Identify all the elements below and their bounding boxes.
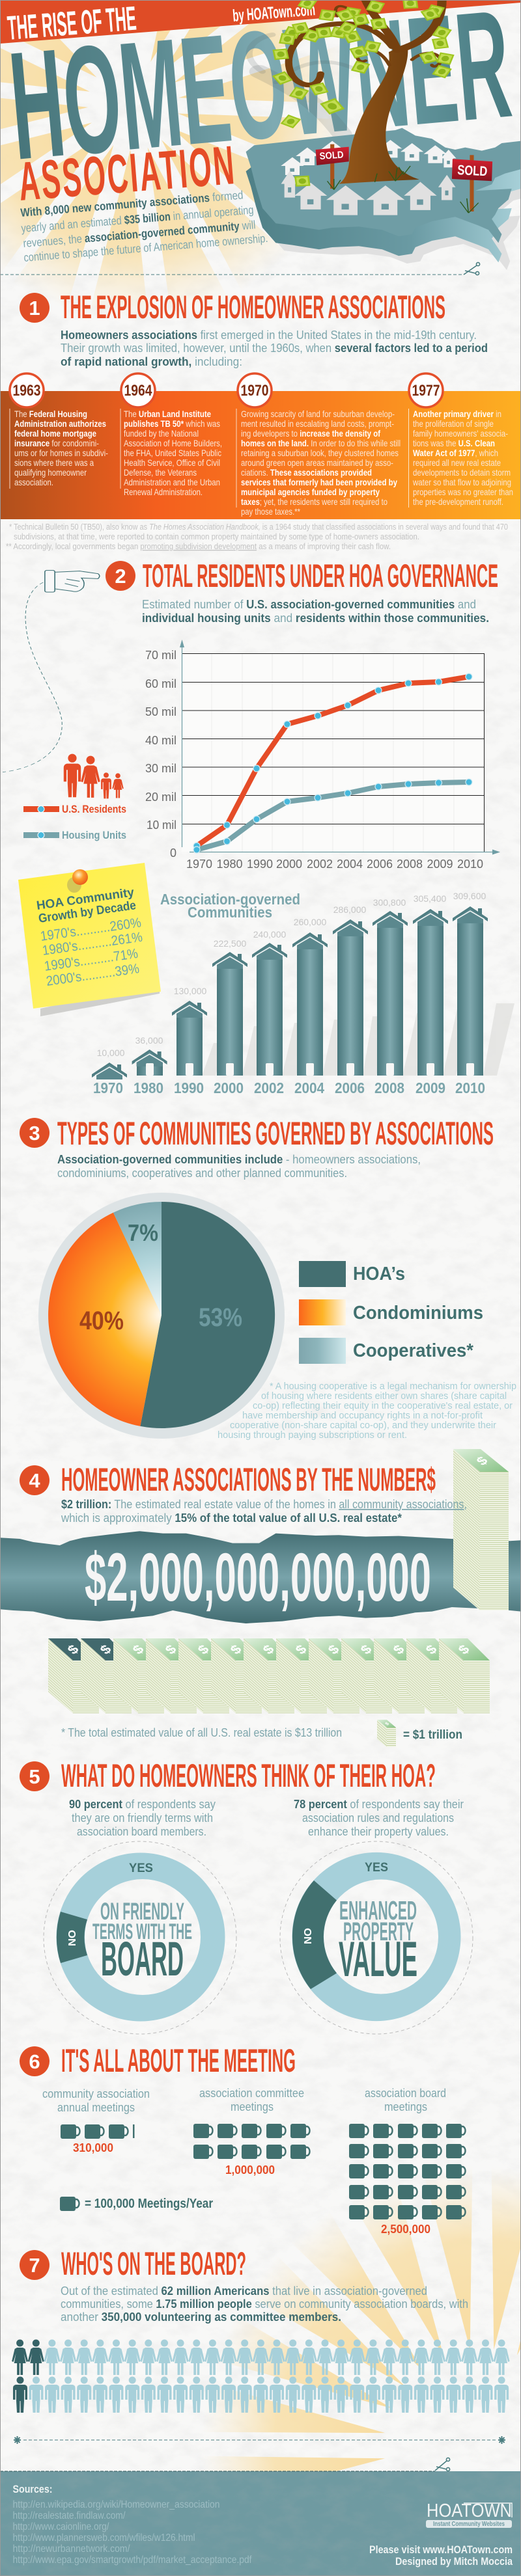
intro text: Homeowners associations first emerged in the United States in the mid-19th century. [61,329,477,342]
section 5 [20,1757,473,2034]
houses [281,140,457,175]
sticky note [18,863,161,1016]
header: intro text: With 8,000 new community associations formed [20,189,244,219]
number badge 3 [20,1118,49,1148]
annual meetings: annual meetings [57,2101,135,2114]
left statement: they are on friendly terms with [72,1811,213,1824]
bar 1980 [132,1035,167,1096]
bar 1990 [172,986,207,1096]
section 6 [20,2042,465,2236]
pie legend: HOA’s [353,1264,405,1284]
column 1964: The Urban Land Institute [124,409,211,419]
left statement [69,1798,216,1838]
tree shadow on letters [249,34,356,135]
icon: scissors [464,262,480,275]
donut: property value: VALUE [339,1932,417,1987]
icon: pointing hand [45,571,100,592]
bar 2004 [292,917,328,1096]
column 1970: homes on the land. In order to do this while still [241,438,401,448]
cooperative footnote [218,1381,516,1441]
axis labels: 0 [170,847,176,860]
column 1963 [10,409,108,489]
header: intro text: revenues, the association-governed community will [23,218,256,250]
axis labels: 30 mil [145,762,176,775]
pie legend [299,1261,483,1364]
note heading [36,886,137,926]
committee meetings: association committee [199,2087,304,2100]
money stacks: row: $ [455,1642,473,1657]
sources list: http://www.plannersweb.com/wfiles/w126.html [13,2532,195,2543]
right statement: association rules and regulations [302,1811,454,1824]
note list: 2000's..........39% [45,961,140,989]
donut: friendly terms: ON FRIENDLY [100,1898,184,1925]
logo: HOATown: Instant Community Websites [433,2521,505,2528]
pie legend: Condominiums [353,1303,483,1323]
column 1963: Administration authorizes [14,418,106,429]
money stacks: row: $ [227,1642,245,1657]
description: which is approximately 15% of the total value of all U.S. real estate* [61,1512,402,1525]
column 1964: funded by the National [124,428,199,439]
money stacks: row: $ [97,1642,115,1657]
axis labels: 40 mil [145,734,176,747]
money stacks: row: $ [325,1642,343,1657]
year labels: 2009 [427,858,453,871]
column 1977: Another primary driver in [413,409,501,419]
bar 1970: 10,000 [97,1048,125,1058]
column 1964: Association of Home Builders, [124,438,222,448]
description [61,2285,468,2324]
axis labels [145,649,176,860]
money stacks: row: $ [292,1642,310,1657]
annual meetings: community association [42,2087,150,2100]
cooperative footnote: cooperative (non-share capital co-op), and they underwrite their [230,1420,496,1431]
year labels: 2006 [367,858,393,871]
description: $2 trillion: The estimated real estate value of the homes in all community associations, [61,1498,467,1511]
footnotes: subdivisions, at that time, were reported to contain common property maintained by some type of home-owners association. [14,532,419,541]
money stacks: row: $ [423,1642,440,1657]
number badge 4: 4 [29,1469,40,1492]
year labels [186,858,483,871]
bar shadows [202,1003,514,1076]
number badge 2: 2 [115,565,126,588]
board meetings: meetings [384,2100,427,2113]
torn banner [0,1531,521,1623]
description: Out of the estimated 62 million Americans that live in association-governed [61,2285,427,2298]
pie chart: 7% [128,1219,158,1246]
column 1970: ing developers to increase the density of [241,428,380,439]
bar 1970: 1970 [93,1079,123,1096]
sources list: http://www.epa.gov/smartgrowth/pdf/market_acceptance.pdf [13,2555,252,2566]
column 1970: taxes; yet, the residents were still required to [241,496,387,507]
column 1964 [120,409,222,497]
column 1977: the proliferation of single [413,418,494,429]
description: Estimated number of U.S. association-governed communities and [142,598,476,611]
bar 1990: 1990 [174,1079,204,1096]
column 1963: qualifying homeowner [14,467,87,478]
annual meetings: 310,000 [73,2141,113,2154]
year badges: 1970 [241,382,268,400]
column 1963: ums or for homes in subdivi- [14,448,108,458]
column 1977: tions was the U.S. Clean [413,438,495,448]
note list: 1990's..........71% [43,946,139,974]
tree trunk [339,44,419,184]
series points [193,673,472,853]
sign 1 [316,147,349,165]
cut line [0,274,464,275]
sign 2 [452,159,492,181]
bar 2008 [373,897,408,1096]
donut: friendly terms: BOARD [101,1932,184,1986]
dashed divider with asterisks [14,2436,505,2444]
bar 2010: 2010 [455,1079,485,1096]
grass [328,166,479,213]
section 7: WHO'S ON THE BOARD? [61,2245,246,2282]
money stacks: row: $ [390,1642,408,1657]
cooperative footnote: of housing where residents either own shares (share capital [261,1390,507,1402]
column 1970: Growing scarcity of land for suburban develop- [241,409,395,419]
column 1970: ciations. These associations provided [241,467,372,478]
bar 2000: 2000 [214,1079,244,1096]
donut: property value: PROPERTY [343,1918,414,1946]
sources list: http://realestate.findlaw.com/ [13,2510,126,2521]
credits [369,2543,513,2568]
year labels: 2004 [337,858,363,871]
number badge 3: 3 [29,1122,40,1145]
section 4 [0,1449,521,1747]
cooperative footnote: * A housing cooperative is a legal mechanism for ownership [270,1381,516,1392]
communities chart title [160,891,300,921]
footnotes: ** Accordingly, local governments began promoting subdivision development as a means of improving their cash flow. [6,541,391,551]
column 1963: federal home mortgage [14,428,96,439]
column 1964: Administration and the Urban [124,477,220,487]
header: intro text: continue to shape the future of American home ownership. [23,232,268,264]
column 1964: Defense, the Veterans [124,467,197,478]
note heading: Growth by Decade [38,899,137,926]
note list: 1980's..........261% [41,930,143,958]
year labels: 1990 [247,858,273,871]
left statement: association board members. [77,1825,206,1838]
description: Association-governed communities include - homeowners associations, [57,1153,421,1166]
board meetings: association board [365,2087,446,2100]
intro text [61,329,488,368]
communities chart title: Communities [188,904,272,921]
number badge 7 [20,2250,49,2280]
donut: property value: NO [303,1928,314,1944]
column 1970: retaining a suburban look, they clustered homes [241,448,399,458]
cooperative footnote: co-op) reflecting their equity in the cooperative's real estate, or [253,1400,513,1411]
number badge 1: 1 [29,297,40,319]
logo: HOATown: HOATOWN [427,2501,512,2521]
note heading: HOA Community [36,886,135,913]
number badge 5: 5 [29,1765,40,1788]
communities chart title: Association-governed [160,891,300,908]
illustration: USA map with houses, tree and signs [246,0,521,270]
column 1963: association. [14,477,53,487]
chart legend: U.S. Residents [62,803,126,815]
people row: women [12,2340,510,2375]
column 1970: pay those taxes.** [241,506,300,517]
year labels: 2002 [307,858,333,871]
axes [180,640,500,855]
donut: property value [280,1841,473,2034]
logo: HOATown [426,2501,512,2528]
column 1970: municipal agencies funded by property [241,487,380,497]
sources list: http://en.wikipedia.org/wiki/Homeowner_association [13,2499,220,2510]
intro text: of rapid national growth, including: [61,355,242,368]
column 1970 [236,409,401,517]
bar 2004: 2004 [294,1079,324,1096]
bar 2010: 309,600 [453,891,486,901]
year labels: 1980 [216,858,243,871]
left statement: 90 percent of respondents say [69,1798,216,1811]
donut: friendly terms: TERMS WITH THE [92,1919,192,1944]
description: another 350,000 volunteering as committee members. [61,2311,341,2324]
year labels: 2008 [397,858,423,871]
bar 2000 [212,938,247,1096]
map side [246,150,521,262]
money stacks: row: $ [260,1642,277,1657]
icon: scissors [435,2458,450,2471]
people row: men [13,2376,509,2413]
donut: friendly terms [44,1841,236,2034]
note list: 1970's..........260% [39,915,142,944]
column 1964: the FHA, United States Public [124,448,221,458]
bar 2004: 260,000 [294,917,327,927]
number badge 5 [20,1761,49,1791]
donut: friendly terms: NO [67,1930,78,1946]
sources list: http://newurbannetwork.com/ [13,2543,130,2555]
bar 1980: 1980 [134,1079,163,1096]
series: housing units [197,782,469,850]
board meetings [349,2087,465,2236]
donut: friendly terms: YES [129,1862,153,1875]
pie chart: 53% [199,1303,242,1332]
pie chart [38,1193,285,1439]
bar 2006: 2006 [335,1079,365,1096]
bar 2006: 286,000 [333,904,367,915]
axis labels: 50 mil [145,705,176,718]
bar 2008: 300,800 [373,897,406,908]
number badge 1 [20,293,49,323]
bar 2009: 305,400 [414,893,447,904]
donut: property value: YES [365,1861,388,1875]
column 1963: sions where there was a [14,457,94,468]
column 1977: required all new real estate [413,457,501,468]
bar 2002 [252,929,287,1096]
column 1977: Water Act of 1977, which [413,448,498,458]
chart legend [23,803,126,841]
column 1964: Renewal Administration. [124,487,203,497]
cooperative footnote: housing through paying subscriptions or rent. [218,1430,407,1441]
cooperative footnote: have membership and occupancy rights in a not-for-profit [242,1410,483,1421]
section 3 [20,1115,516,1441]
sources heading: Sources: [13,2483,52,2495]
committee meetings [193,2087,310,2176]
header: association: ASSOCIATION [16,134,238,212]
description: condominiums, cooperatives and other planned communities. [57,1167,347,1180]
sold sign poles [330,144,334,189]
timeline band [0,391,521,519]
column 1964: publishes TB 50* which was [124,418,220,429]
money stack: tall: $ [473,1454,491,1468]
value footnote: * The total estimated value of all U.S. real estate is $13 trillion [61,1726,342,1739]
map top [246,128,521,243]
section 7 [12,2245,510,2413]
sources list [13,2499,252,2566]
bar 2008: 2008 [374,1079,404,1096]
money legend: $ [384,1720,391,1726]
number badge 4 [20,1465,49,1495]
bar 1970 [92,1048,127,1096]
axis labels: 10 mil [147,819,176,832]
dashed connector [3,582,62,772]
money stacks: row [48,1638,490,1713]
bar 1990: 130,000 [174,986,207,996]
year badges [10,373,443,407]
year labels: 1970 [186,858,212,871]
map shadow [254,168,521,270]
bar 1980: 36,000 [135,1035,163,1046]
year badges: 1977 [412,382,440,400]
footer [0,2458,521,2576]
column 1977 [409,409,513,508]
bar 2010 [453,891,488,1096]
sunburst: lower [201,2166,521,2505]
donut: property value: ENHANCED [339,1895,417,1925]
description: individual housing units and residents within those communities. [142,612,489,625]
committee meetings: 1,000,000 [225,2163,275,2176]
sources list: http://www.caionline.org/ [13,2521,109,2532]
bar 2009 [413,893,448,1096]
pin [67,869,88,893]
money legend: = $1 trillion [403,1728,462,1742]
money stack: tall [453,1449,509,1610]
section 1 [0,289,521,551]
line chart [145,640,500,871]
right statement: enhance their property values. [308,1825,449,1838]
description [57,1153,421,1180]
money stacks: row: $ [162,1642,180,1657]
number badge 2 [106,561,135,591]
year labels: 2000 [276,858,302,871]
column 1970: around green open areas maintained by asso- [241,457,393,468]
tree branches [289,0,442,85]
bar 2006 [333,904,368,1096]
money stacks: row: $ [195,1642,212,1657]
column 1970: ment resulted in escalating land costs, prompt- [241,418,394,429]
pie chart: 40% [79,1307,124,1335]
money stacks: row: $ [64,1642,82,1657]
pie legend: Cooperatives* [353,1340,474,1361]
axis labels: 20 mil [145,791,176,804]
number badge 6 [20,2046,49,2076]
board meetings: 2,500,000 [381,2223,430,2236]
series: residents [197,677,469,846]
chart legend: Housing Units [62,829,126,841]
committee meetings: meetings [231,2100,274,2113]
right statement [294,1798,464,1838]
header: intro text [20,189,268,264]
mug legend: = 100,000 Meetings/Year [85,2197,213,2211]
house bar chart [92,891,488,1096]
right statement: 78 percent of respondents say their [294,1798,464,1811]
number badge 6: 6 [29,2050,40,2073]
header: intro text: yearly and an estimated $35 billion in annual operating [21,203,254,235]
footnotes [6,522,508,551]
column 1964: Health Service, Office of Civil [124,457,220,468]
year labels: 2010 [457,858,483,871]
intro text: Their growth was limited, however, until the 1960s, when several factors led to a period [61,342,488,355]
bar 2009: 2009 [415,1079,445,1096]
column 1970: services that formerly had been provided by [241,477,397,487]
axis labels: 70 mil [145,649,176,662]
description [142,598,489,625]
section 2 [3,558,514,1096]
annual meetings [42,2087,150,2154]
bar 2000: 222,500 [214,938,247,949]
sunburst: header [0,0,350,320]
bar 2002: 2002 [254,1079,284,1096]
money stacks: row: $ [130,1642,147,1657]
icon: family [64,754,124,798]
note list [39,915,143,989]
money stacks: row: $ [358,1642,375,1657]
sold label 1: SOLD [319,149,344,162]
number badge 7: 7 [29,2254,40,2277]
axis labels: 60 mil [145,677,176,690]
description: communities, some 1.75 million people serve on community association boards, with [61,2298,468,2311]
year badges: 1963 [13,382,40,400]
column 1963: insurance for condomini- [14,438,99,448]
sold label 2: SOLD [457,163,488,179]
money leaves [272,0,455,187]
year badges: 1964 [124,382,152,400]
money legend [377,1720,462,1747]
header: title band [0,0,521,44]
column 1963: The Federal Housing [14,409,87,419]
bar 2002: 240,000 [253,929,287,940]
description [61,1498,467,1525]
